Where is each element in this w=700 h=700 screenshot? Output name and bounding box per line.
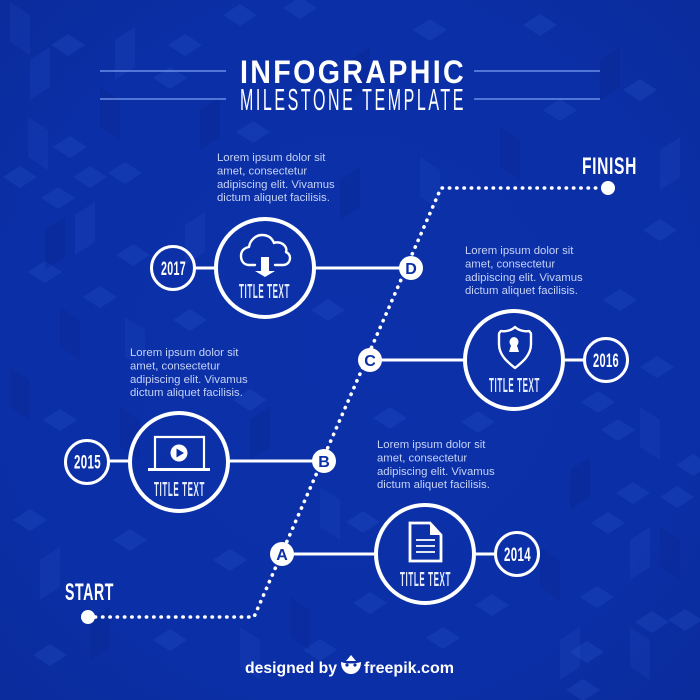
text block A: adipiscing elit. Vivamus xyxy=(377,466,495,478)
finish marker xyxy=(582,153,637,195)
circle: title text: TITLE TEXT xyxy=(489,375,540,397)
node A: A xyxy=(276,547,288,564)
text block D: adipiscing elit. Vivamus xyxy=(217,179,335,191)
text block C: dictum aliquet facilisis. xyxy=(465,285,578,297)
icon: document xyxy=(410,523,441,561)
circle: title text xyxy=(376,505,474,603)
node D xyxy=(399,256,423,280)
year 2014 xyxy=(496,532,538,576)
text block B: amet, consectetur xyxy=(130,360,220,372)
year 2014: 2014 xyxy=(504,545,531,566)
icon: laptop play xyxy=(148,437,210,471)
text block B: adipiscing elit. Vivamus xyxy=(130,374,248,386)
footer credit: designed by xyxy=(245,660,337,677)
text block C: adipiscing elit. Vivamus xyxy=(465,272,583,284)
node B xyxy=(312,449,336,473)
circle: title text: TITLE TEXT xyxy=(239,281,290,303)
dotted timeline path xyxy=(88,188,608,617)
node A xyxy=(270,542,294,566)
icon: freepik logo xyxy=(341,655,361,674)
title xyxy=(240,54,466,117)
year 2015 xyxy=(66,440,108,484)
node B: B xyxy=(318,454,330,471)
text block D: amet, consectetur xyxy=(217,165,307,177)
title rules xyxy=(100,71,600,99)
year 2016: 2016 xyxy=(593,351,619,372)
start marker xyxy=(65,579,114,624)
circle: title text xyxy=(216,219,314,317)
text block A: amet, consectetur xyxy=(377,452,467,464)
milestone A 2014 xyxy=(292,439,538,603)
node D: D xyxy=(405,261,417,278)
title: INFOGRAPHIC xyxy=(240,54,466,90)
circle: title text: TITLE TEXT xyxy=(154,479,205,501)
text block D: dictum aliquet facilisis. xyxy=(217,192,330,204)
text block B: Lorem ipsum dolor sit xyxy=(130,347,238,359)
milestone B 2015 xyxy=(66,347,315,511)
year 2015: 2015 xyxy=(74,452,101,474)
node C: C xyxy=(364,353,376,370)
node C xyxy=(358,348,382,372)
year 2016 xyxy=(584,338,628,382)
circle: title text: TITLE TEXT xyxy=(400,569,451,591)
text block A: Lorem ipsum dolor sit xyxy=(377,439,485,451)
circle: title text xyxy=(465,311,563,409)
milestone C 2016 xyxy=(380,245,628,409)
milestone D 2017 xyxy=(152,152,402,317)
icon: cloud download xyxy=(241,235,290,277)
text block A: dictum aliquet facilisis. xyxy=(377,479,490,491)
text block B: dictum aliquet facilisis. xyxy=(130,387,243,399)
year 2017: 2017 xyxy=(161,259,186,280)
year 2017 xyxy=(152,246,194,290)
footer credit: freepik.com xyxy=(364,660,454,677)
circle: title text xyxy=(130,413,228,511)
finish marker: FINISH xyxy=(582,153,637,180)
title: MILESTONE TEMPLATE xyxy=(240,82,466,117)
start marker: START xyxy=(65,579,114,606)
footer credit xyxy=(245,655,454,677)
text block C: Lorem ipsum dolor sit xyxy=(465,245,573,257)
text block D: Lorem ipsum dolor sit xyxy=(217,152,325,164)
text block C: amet, consectetur xyxy=(465,258,555,270)
icon: shield keyhole xyxy=(499,327,531,368)
